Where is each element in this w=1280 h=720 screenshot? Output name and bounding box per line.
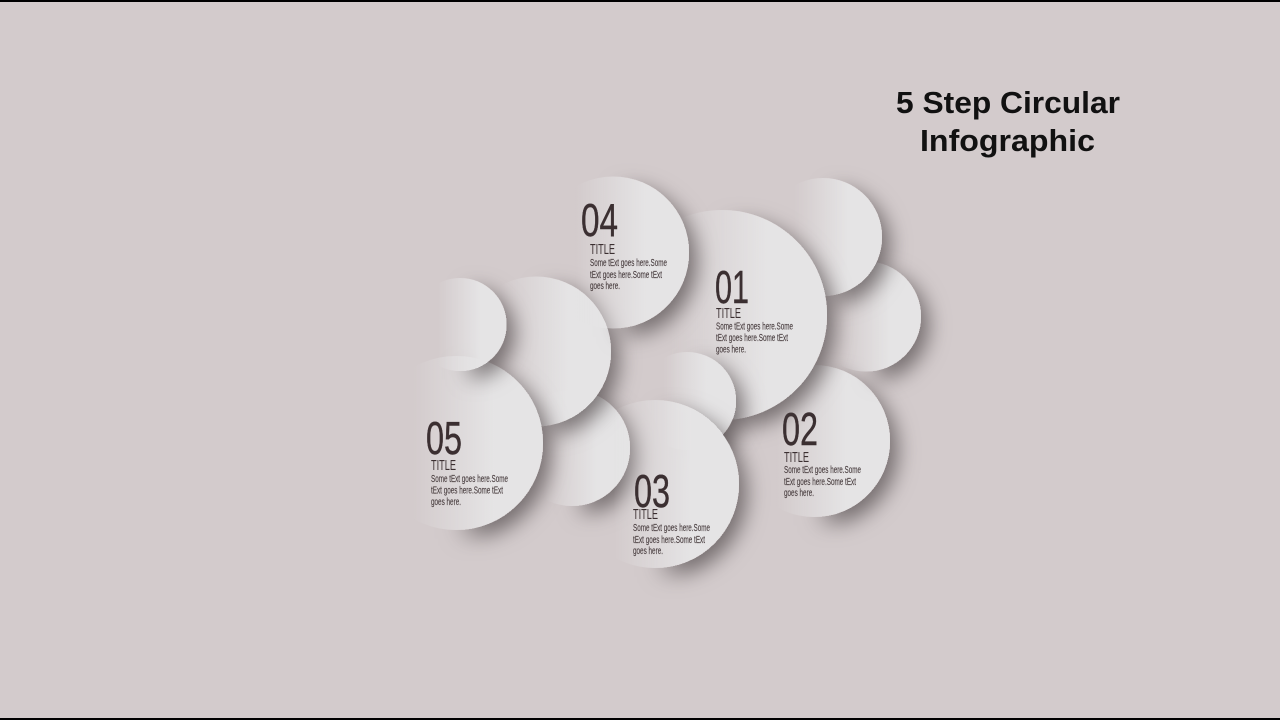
step 04: goes here. xyxy=(590,281,620,292)
title xyxy=(896,85,1120,158)
decorative circle: top right small xyxy=(764,178,882,296)
step 02: Some tExt goes here.Some xyxy=(784,465,861,476)
step 03: Some tExt goes here.Some xyxy=(633,523,710,534)
decorative circle: centre small xyxy=(638,352,736,450)
step 03: goes here. xyxy=(633,546,663,557)
title: Infographic xyxy=(920,123,1095,158)
step 03: TITLE xyxy=(633,506,658,523)
step 04 xyxy=(537,176,689,328)
step 02: TITLE xyxy=(784,449,809,466)
step 04: tExt goes here.Some tExt xyxy=(590,270,662,281)
step 04: TITLE xyxy=(590,241,615,258)
step 05 xyxy=(369,356,543,530)
step 05: TITLE xyxy=(431,457,456,474)
step 01: Some tExt goes here.Some xyxy=(716,322,793,332)
step 01 xyxy=(617,210,827,420)
decorative circle: left small xyxy=(414,278,506,371)
step 05: Some tExt goes here.Some xyxy=(431,474,508,485)
step 02 xyxy=(738,365,890,517)
step 02: tExt goes here.Some tExt xyxy=(784,477,856,488)
step 05: tExt goes here.Some tExt xyxy=(431,486,503,496)
decorative circle: right small xyxy=(811,262,921,372)
step 02: goes here. xyxy=(784,488,814,499)
step 04: Some tExt goes here.Some xyxy=(590,258,667,269)
step 01: TITLE xyxy=(716,305,741,322)
title: 5 Step Circular xyxy=(896,85,1120,120)
step 03: tExt goes here.Some tExt xyxy=(633,535,705,546)
step 01: tExt goes here.Some tExt xyxy=(716,333,788,344)
step 04: 04 xyxy=(581,194,618,246)
step 05: goes here. xyxy=(431,497,461,508)
step 01: goes here. xyxy=(716,344,746,356)
decorative circle: lower left small xyxy=(514,390,630,506)
step 01: 01 xyxy=(715,261,749,313)
decorative circle: left large xyxy=(461,276,611,426)
step 02: 02 xyxy=(782,403,818,455)
step 03: 03 xyxy=(634,465,670,517)
step 03 xyxy=(571,400,739,568)
step 05: 05 xyxy=(426,412,462,464)
